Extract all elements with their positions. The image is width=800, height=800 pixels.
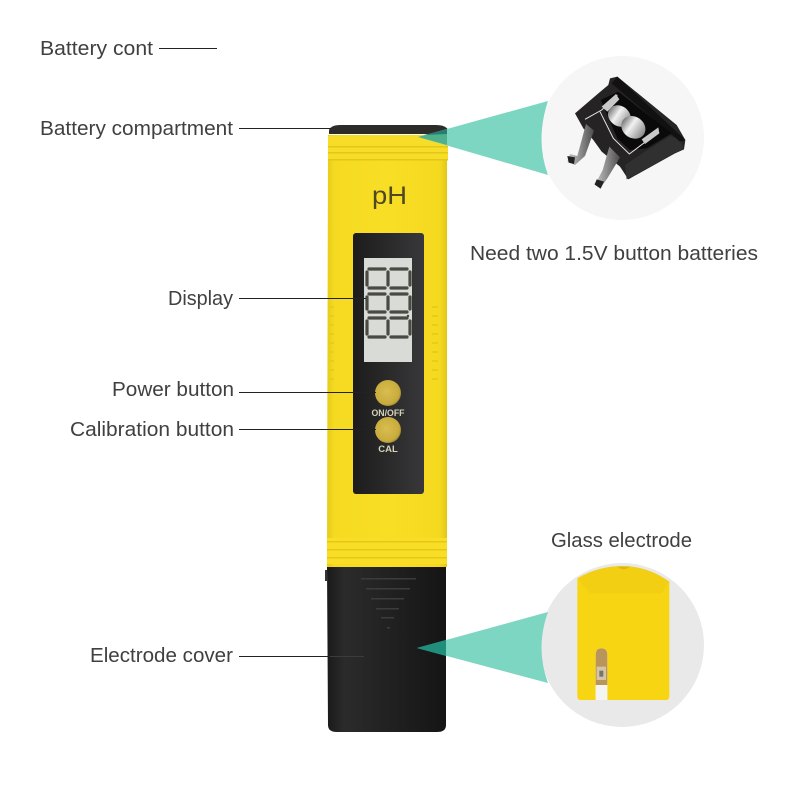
calibration button: CAL [378, 444, 398, 455]
lower ridges [327, 538, 447, 564]
panel: pH meter [325, 125, 448, 732]
label: battery cont: Battery cont [40, 38, 153, 60]
battery cap [329, 125, 448, 134]
control panel [353, 233, 424, 494]
calibration button [375, 417, 401, 455]
power button: ON/OFF [372, 408, 405, 419]
caption: glass electrode: Glass electrode [551, 530, 692, 552]
icon: battery holder photo [567, 77, 685, 189]
power button [372, 380, 405, 419]
arrow: glass electrode callout [417, 612, 548, 683]
side grips [328, 306, 438, 380]
LCD screen [364, 258, 412, 362]
label: display: Display [168, 288, 233, 310]
inset circle: battery holder [540, 56, 704, 220]
label: calibration button: Calibration button [70, 419, 234, 441]
pH mark: pH [372, 182, 407, 210]
upper ridges [328, 136, 448, 160]
label: electrode cover: Electrode cover [90, 645, 233, 667]
label: power button: Power button [112, 379, 234, 401]
icon: electrode close-up [577, 566, 669, 700]
caption: batteries: Need two 1.5V button batteries [470, 243, 758, 265]
electrode cover [325, 567, 446, 732]
arrow: battery compartment callout [418, 101, 548, 175]
label: battery compartment: Battery compartment [40, 118, 233, 140]
meter yellow body [327, 135, 447, 567]
inset circle: glass electrode [540, 563, 704, 727]
